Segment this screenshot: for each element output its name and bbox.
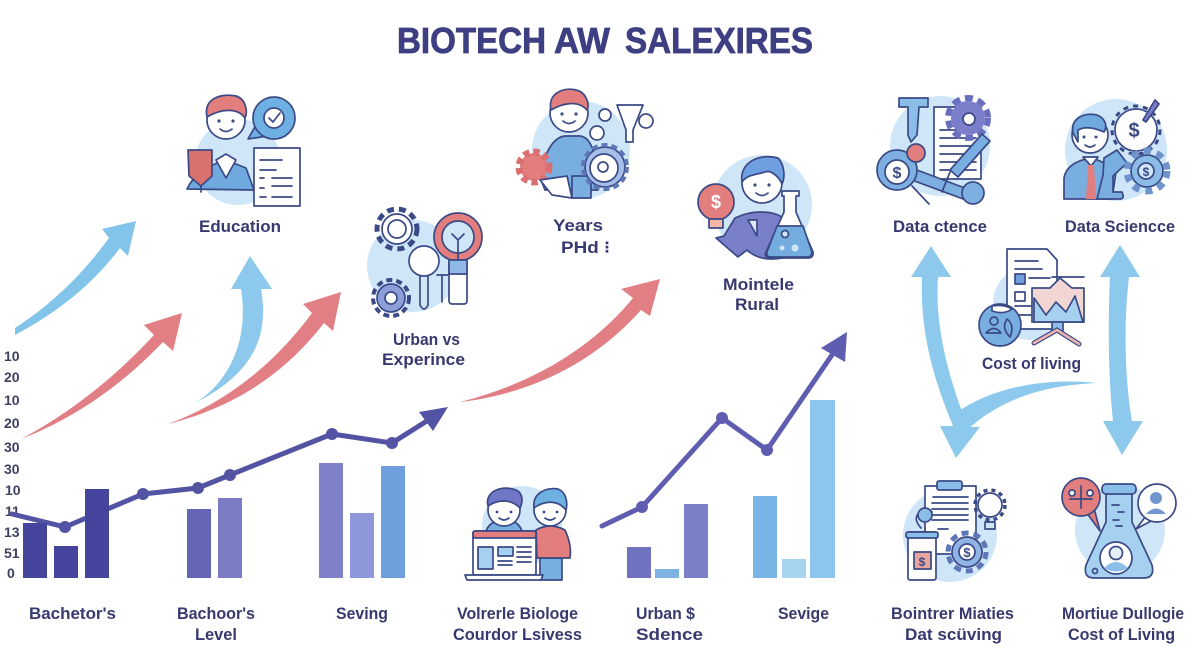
label: bachetor's: Bachetor's (29, 604, 116, 623)
title: AW (554, 20, 610, 61)
y-axis numbers: 10 (5, 482, 21, 498)
y-axis numbers: 51 (4, 545, 20, 561)
arrow: red left (21, 313, 182, 439)
arrow: blue top-left (15, 221, 136, 335)
y-axis numbers: 30 (4, 439, 20, 455)
label: urban vs experience (382, 330, 465, 369)
label: years phd: PHd ⁝ (561, 238, 610, 257)
label: bointrer miaties: Dat scüving (905, 625, 1002, 644)
arrow: blue double-headed left (911, 246, 980, 458)
icon: urban vs experience (367, 209, 482, 316)
icon: data tools: $ (893, 165, 902, 182)
label: sevige: Sevige (778, 604, 829, 623)
label: volrerle biologe: Courdor Lsivess (453, 625, 582, 644)
line chart: left trend (12, 407, 448, 533)
y-axis numbers: 20 (4, 415, 20, 431)
label: volrerle biologe (453, 604, 582, 644)
label: years phd (553, 216, 610, 257)
label: urban vs experience: Experince (382, 350, 465, 369)
label: bointrer miaties: Bointrer Miaties (891, 604, 1014, 623)
arrow: blue double-headed right (1100, 245, 1143, 455)
label: mortiue dullogie (1062, 604, 1184, 644)
label: urban sdence: Sdence (636, 625, 703, 644)
label: bointrer miaties (891, 604, 1014, 644)
label: education: Education (199, 217, 281, 236)
icon: clipboard with gear and bulb: $ (919, 555, 926, 569)
arrow: blue curved centre (195, 256, 272, 403)
label: urban vs experience: Urban vs (393, 330, 460, 349)
icon: flask with speech bubbles (1062, 478, 1176, 578)
y-axis numbers: 13 (4, 524, 20, 540)
label: mointele rural: Mointele (723, 275, 794, 294)
label: bachoor's level: Level (195, 625, 237, 644)
line chart: right trend (602, 332, 847, 526)
bar chart: right group (627, 400, 835, 578)
label: volrerle biologe: Volrerle Biologe (457, 604, 578, 623)
icon: education person (187, 95, 300, 206)
y-axis numbers: 11 (5, 503, 20, 519)
label: seving: Seving (336, 604, 388, 623)
label: urban sdence (636, 604, 703, 644)
label: data ctence: Data ctence (893, 217, 987, 236)
icon: rural person with flask: $ (711, 192, 721, 212)
label: bachoor's level (177, 604, 255, 644)
title (397, 20, 813, 61)
label: mortiue dullogie: Mortiue Dullogie (1062, 604, 1184, 623)
arrow: red right (460, 279, 660, 402)
title: SALEXIRES (625, 20, 813, 61)
y-axis numbers: 30 (4, 461, 20, 477)
icon: clipboard with gear and bulb: $ (963, 545, 971, 560)
icon: data science person: $ (1128, 120, 1140, 142)
label: mortiue dullogie: Cost of Living (1068, 625, 1175, 644)
icon: clipboard with gear and bulb (903, 481, 1005, 582)
y-axis numbers: 10 (4, 348, 20, 364)
arrow: blue curve into left head (952, 382, 1097, 436)
label: cost of living: Cost of living (982, 354, 1081, 373)
y-axis numbers: 10 (4, 392, 20, 408)
icon: two people at laptop (465, 486, 570, 580)
y-axis numbers (4, 348, 21, 581)
icon: years person with gears (519, 89, 653, 199)
label: years phd: Years (553, 216, 603, 235)
bar chart: left group (23, 463, 405, 578)
title: BIOTECH (397, 20, 546, 61)
label: bachoor's level: Bachoor's (177, 604, 255, 623)
label: mointele rural (723, 275, 794, 314)
icon: cost of living (979, 249, 1084, 346)
arrow: red centre (168, 292, 341, 424)
label: data science: Data Sciencce (1065, 217, 1175, 236)
icon: data science person (1064, 99, 1167, 201)
icon: data science person: $ (1143, 165, 1150, 179)
label: urban sdence: Urban $ (636, 604, 696, 623)
y-axis numbers: 0 (7, 565, 15, 581)
label: mointele rural: Rural (735, 295, 779, 314)
y-axis numbers: 20 (4, 369, 20, 385)
icon: rural person with flask (698, 155, 813, 259)
icon: data tools (877, 96, 990, 204)
